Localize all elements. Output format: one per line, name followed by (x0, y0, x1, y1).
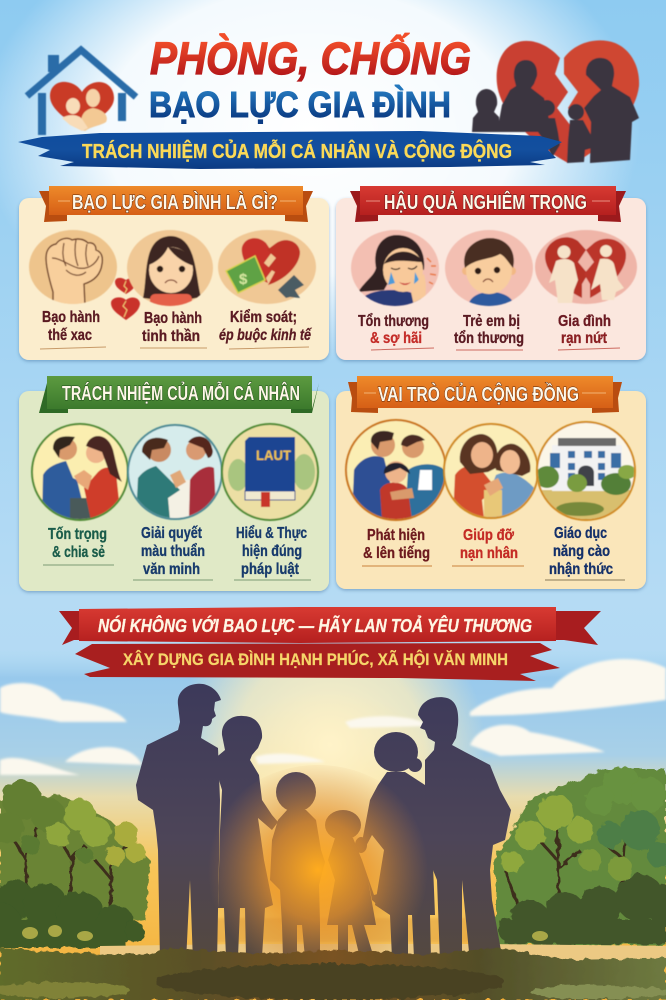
heading ribbon: VAI TRÒ CỦA CỘNG ĐỒNG (378, 382, 579, 406)
labels: ép buộc kinh tế (219, 327, 313, 344)
icon: law book: LAUT (256, 447, 291, 463)
labels: màu thuẩn (141, 542, 205, 560)
heading ribbon (39, 376, 319, 413)
trees right (495, 766, 666, 945)
icon: house with heart (27, 50, 136, 135)
icon: community protecting child (345, 419, 447, 521)
labels: thế xac (48, 327, 92, 344)
heading ribbon: TRÁCH NHIỆM CỦA MỖI CÁ NHÂN (62, 381, 300, 405)
sky (0, 650, 666, 1000)
silhouette: father left (136, 684, 221, 962)
icon: family split by broken heart (535, 230, 637, 304)
subtitle band: TRÁCH NHIIỆM CỦA MỖI CÁ NHÂN VÀ CỘNG ĐỘNG (82, 139, 512, 163)
header (18, 33, 639, 169)
icon: couple respect (31, 423, 129, 525)
illustration: family at sunset (0, 650, 666, 1000)
labels: nạn nhân (460, 545, 518, 562)
icon: helping victim (443, 423, 539, 520)
panel: vai tro cong dong (336, 376, 646, 589)
labels: tổn thương (454, 329, 524, 347)
foreground brush (0, 948, 666, 1000)
labels: Tốn trọng (48, 526, 107, 543)
heading ribbon: BẠO LỰC GIA ĐÌNH LÀ GÌ? (72, 191, 278, 214)
background hedge (200, 918, 470, 942)
labels (363, 525, 613, 578)
icon: fist (29, 230, 117, 305)
heading ribbon (39, 186, 313, 222)
icon: conflict resolution (127, 424, 223, 520)
panel: hau qua nghiem trong (336, 186, 646, 360)
title line 1: PHÒNG, CHỐNG (150, 33, 471, 84)
labels: Hiểu & Thực (236, 524, 307, 542)
clouds (0, 659, 666, 775)
icon: sad girl (127, 230, 213, 308)
labels: & chia sẻ (52, 544, 105, 561)
silhouette: father right (418, 697, 511, 962)
labels: hiện đúng (242, 543, 302, 560)
icon: small broken hearts (111, 278, 140, 320)
icon: money and broken heart: $ (239, 271, 248, 288)
labels: Giúp đỡ (463, 527, 515, 544)
leaves left (22, 925, 548, 941)
labels: Bạo hành (42, 309, 100, 326)
labels: Giáo dục (554, 525, 607, 542)
labels: & sợ hãi (370, 330, 422, 347)
banner: subtitle brush (75, 643, 560, 681)
icon: broken heart with family (472, 40, 639, 163)
icon: money and broken heart (218, 230, 316, 304)
banner: subtitle brush: XÂY DỰNG GIA ĐÌNH HẠNH PHÚC, XÃ HỘI VĂN MINH (123, 649, 508, 669)
heading ribbon: HẬU QUẢ NGHIÊM TRỌNG (384, 190, 587, 214)
heading ribbon (348, 376, 622, 413)
labels: Gia đình (558, 313, 611, 330)
labels (48, 524, 307, 578)
labels (358, 312, 611, 347)
labels (42, 308, 313, 345)
panel: bao luc gia dinh la gi (19, 186, 329, 360)
labels: & lên tiếng (363, 545, 430, 562)
heading ribbon (350, 186, 626, 222)
sun glow over silhouettes (203, 765, 433, 975)
labels: văn minh (143, 561, 200, 578)
labels: rạn nứt (561, 330, 608, 347)
labels: Tổn thương (358, 312, 429, 330)
labels: Bạo hành (144, 310, 202, 327)
labels: Phát hiện (367, 527, 425, 544)
silhouette: woman right (362, 732, 440, 958)
icon: school (535, 421, 636, 522)
banner: slogan: NÓI KHÔNG VỚI BAO LỰC — HÃY LAN TOẢ YÊU THƯƠNG (98, 615, 532, 636)
silhouette: girl (325, 810, 389, 958)
labels: pháp luật (241, 561, 300, 578)
banner: slogan (59, 607, 601, 645)
title line 2: BẠO LỰC GIA ĐÌNH (149, 84, 451, 125)
panel: trach nhiem ca nhan (19, 376, 329, 591)
labels: năng cào (553, 543, 610, 560)
labels: Trẻ em bị (463, 313, 520, 330)
icon: sad boy (445, 230, 533, 310)
icon: crying woman (351, 230, 439, 310)
labels: Kiểm soát; (230, 308, 297, 326)
trees left (0, 780, 150, 948)
labels: nhận thức (549, 561, 613, 578)
ground path (100, 944, 666, 966)
subtitle band (18, 131, 562, 169)
silhouette: woman left (213, 716, 278, 957)
silhouette: boy (270, 772, 325, 958)
icon: law book (221, 423, 319, 521)
labels: tinh thần (142, 328, 200, 345)
labels: Giải quyết (141, 525, 203, 542)
bottom banner (59, 607, 601, 681)
